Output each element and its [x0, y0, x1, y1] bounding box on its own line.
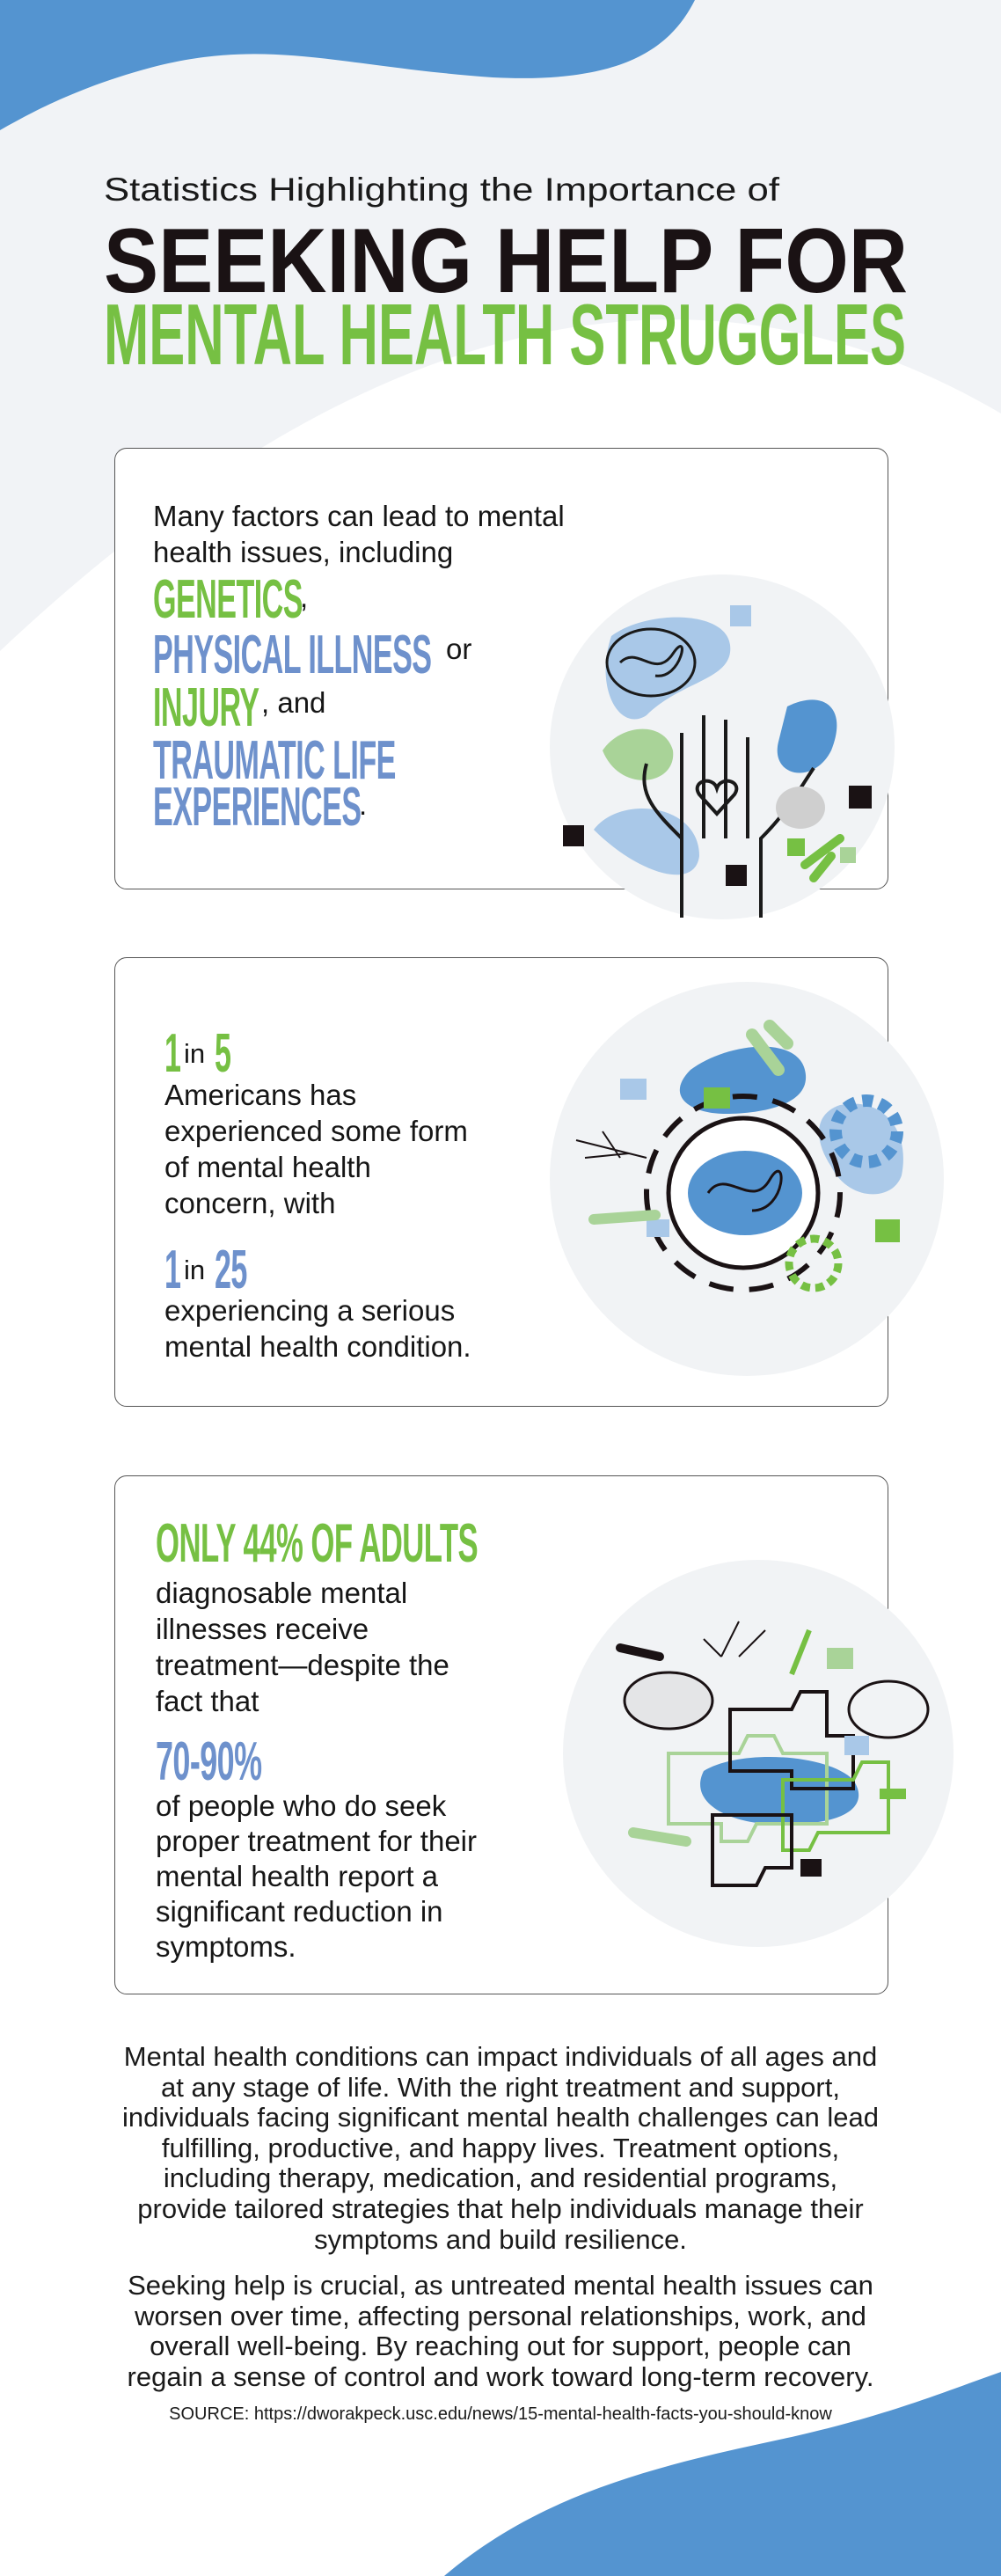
- text: paragraph 1: provide tailored strategies that help individuals manage their: [137, 2193, 864, 2224]
- panel: card 1: [114, 448, 888, 889]
- text: intro: [153, 500, 565, 568]
- text: diagnosable: illnesses receive: [156, 1613, 369, 1645]
- icon: hand illustration: [550, 574, 895, 919]
- text: paragraph 1: [122, 2041, 879, 2255]
- text: paragraph 1: at any stage of life. With the right treatment and support,: [161, 2072, 840, 2103]
- title: [104, 172, 908, 378]
- text: paragraph 1: fulfilling, productive, and happy lives. Treatment options,: [162, 2133, 839, 2163]
- text: americans: of mental health: [164, 1151, 371, 1183]
- text: traumatic: TRAUMATIC LIFE: [153, 730, 396, 791]
- text: paragraph 2: worsen over time, affecting personal relationships, work, and: [135, 2301, 866, 2331]
- text: source: SOURCE: https://dworakpeck.usc.edu/news/15-mental-health-facts-you-should-know: [169, 2404, 832, 2424]
- stat: 1 in 25: in: [184, 1255, 205, 1285]
- text: paragraph 1: individuals facing significant mental health challenges can lead: [122, 2102, 879, 2133]
- text: injury: INJURY: [153, 677, 259, 738]
- text: americans: experienced some form: [164, 1115, 468, 1147]
- text: intro: Many factors can lead to mental: [153, 500, 565, 532]
- text: diagnosable: [156, 1577, 449, 1717]
- text: americans: [164, 1079, 468, 1219]
- text: paragraph 1: including therapy, medication, and residential programs,: [164, 2163, 837, 2193]
- text: experiences: EXPERIENCES: [153, 777, 362, 838]
- text: intro: health issues, including: [153, 536, 453, 568]
- panel: card 1: ,: [300, 581, 308, 613]
- text: proper treatment: significant reduction in: [156, 1895, 443, 1928]
- text: genetics: GENETICS: [153, 569, 303, 630]
- text: diagnosable: fact that: [156, 1685, 259, 1717]
- text: diagnosable: diagnosable mental: [156, 1577, 407, 1609]
- text: paragraph 2: overall well-being. By reaching out for support, people can: [150, 2331, 851, 2361]
- text: proper treatment: mental health report a: [156, 1860, 438, 1892]
- panel: card 1: or: [446, 633, 471, 665]
- stat: 70-90%: 70-90%: [156, 1731, 261, 1792]
- text: paragraph 1: symptoms and build resilience.: [314, 2224, 687, 2255]
- stat: only 44%: ONLY 44% OF ADULTS: [156, 1513, 478, 1574]
- text: proper treatment: proper treatment for their: [156, 1825, 477, 1857]
- stat: 1 in 25: 1: [164, 1240, 180, 1300]
- text: americans: Americans has: [164, 1079, 356, 1111]
- icon: puzzle illustration: [563, 1560, 954, 1947]
- text: serious: experiencing a serious: [164, 1294, 455, 1327]
- stat: 1 in 25: [164, 1240, 247, 1300]
- text: proper treatment: symptoms.: [156, 1930, 296, 1963]
- text: proper treatment: [156, 1789, 477, 1963]
- text: proper treatment: of people who do seek: [156, 1789, 446, 1822]
- text: serious: mental health condition.: [164, 1330, 471, 1363]
- title: SEEKING HELP FOR: [104, 210, 908, 312]
- text: physical illness: PHYSICAL ILLNESS: [153, 625, 431, 685]
- title: Statistics Highlighting the Importance of: [104, 172, 780, 208]
- stat: 1 in 5: 5: [215, 1023, 230, 1084]
- panel: card 1: , and: [261, 686, 325, 719]
- text: diagnosable: treatment—despite the: [156, 1649, 449, 1681]
- text: paragraph 1: Mental health conditions can impact individuals of all ages and: [124, 2041, 877, 2072]
- stat: 1 in 25: 25: [215, 1240, 247, 1300]
- stat: 1 in 5: in: [184, 1038, 205, 1069]
- panel: card 1: .: [359, 788, 367, 821]
- panel: card 2: [114, 957, 888, 1407]
- text: paragraph 2: regain a sense of control and work toward long-term recovery.: [128, 2361, 873, 2392]
- stat: 1 in 5: [164, 1023, 230, 1084]
- stat: 1 in 5: 1: [164, 1023, 180, 1084]
- text: serious: [164, 1294, 471, 1363]
- text: paragraph 2: Seeking help is crucial, as untreated mental health issues can: [128, 2270, 873, 2301]
- panel: card 3: [114, 1475, 888, 1994]
- icon: gear brain illustration: [550, 982, 944, 1376]
- text: paragraph 2: [128, 2270, 873, 2392]
- text: americans: concern, with: [164, 1187, 335, 1219]
